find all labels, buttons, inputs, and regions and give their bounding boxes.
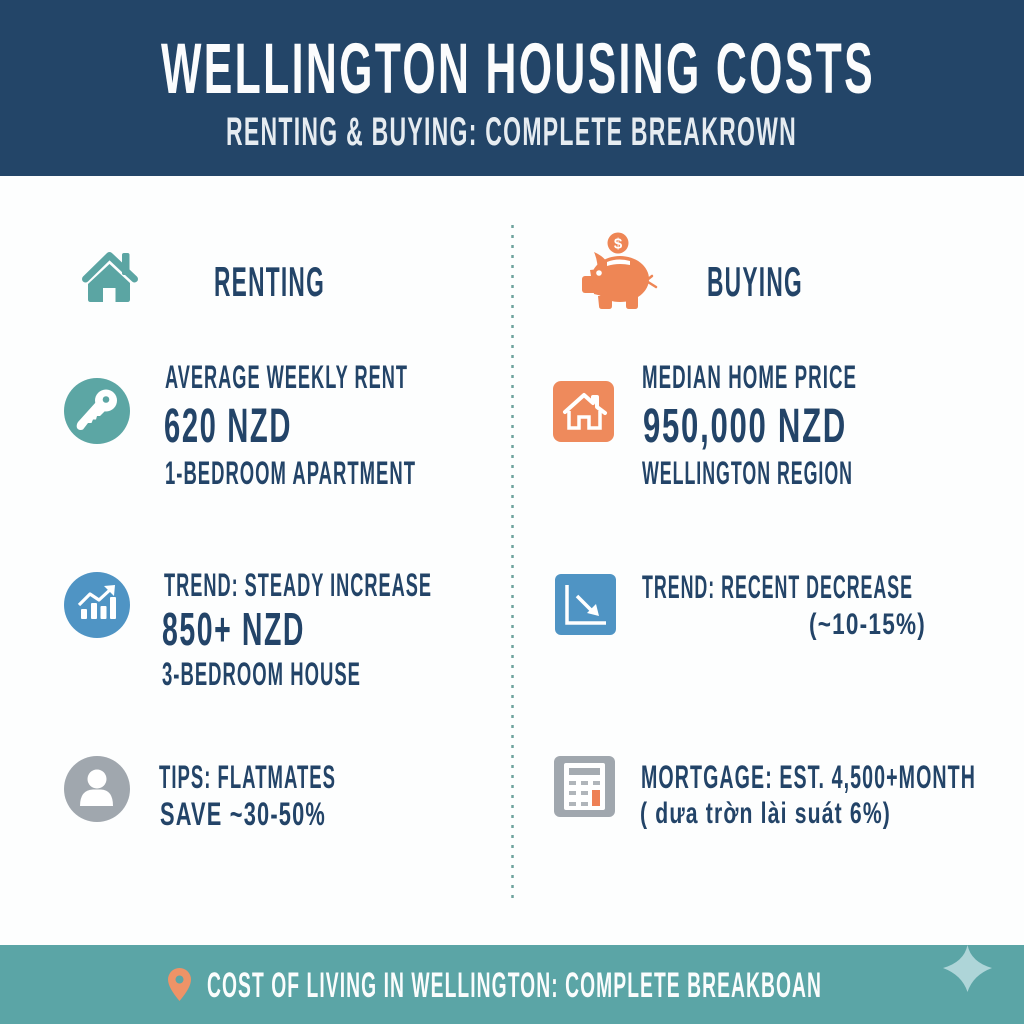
icon: piggy bank: $: [614, 236, 623, 252]
icon: sparkle: [943, 945, 992, 992]
icon: falling trend chart: [555, 574, 616, 635]
icon: house in square: [553, 381, 614, 442]
stat: trend steady increase: 3-BEDROOM HOUSE: [162, 656, 361, 692]
stat: average weekly rent: AVERAGE WEEKLY RENT: [165, 359, 408, 395]
header banner: [0, 0, 1024, 176]
tip: flatmates: [159, 759, 336, 832]
stat: average weekly rent: [164, 359, 416, 491]
stat: average weekly rent: 1-BEDROOM APARTMENT: [165, 455, 416, 491]
icon: location pin: [168, 968, 191, 1001]
icon: rising trend chart: [64, 572, 130, 638]
panel: buying: [553, 232, 976, 830]
stat: trend recent decrease: [642, 569, 926, 641]
stat: mortgage: ( dưa trờn lài suát 6%): [640, 797, 891, 830]
icon: teal house: [86, 253, 134, 302]
stat: median home price: [642, 359, 857, 491]
stat: median home price: WELLINGTON REGION: [642, 455, 853, 491]
stat: mortgage: [640, 759, 976, 830]
icon: calculator: [554, 756, 615, 817]
stat: trend recent decrease: (~10-15%): [809, 608, 926, 641]
center dotted divider: [511, 225, 514, 900]
stat: median home price: 950,000 NZD: [643, 400, 847, 453]
tip: flatmates: TIPS: FLATMATES: [159, 759, 336, 795]
icon: piggy bank: [582, 232, 656, 309]
footer banner: [0, 945, 1024, 1024]
icon: person: [64, 756, 130, 822]
heading: renting: RENTING: [214, 258, 325, 305]
heading: buying: BUYING: [707, 258, 803, 305]
stat: trend steady increase: TREND: STEADY INCREASE: [164, 567, 432, 603]
stat: trend steady increase: 850+ NZD: [162, 603, 305, 655]
panel: renting: [64, 253, 432, 832]
stat: median home price: MEDIAN HOME PRICE: [642, 359, 857, 395]
stat: average weekly rent: 620 NZD: [164, 400, 292, 453]
tip: flatmates: SAVE ~30-50%: [160, 796, 326, 832]
icon: key: [64, 378, 130, 444]
stat: trend steady increase: [162, 567, 432, 692]
